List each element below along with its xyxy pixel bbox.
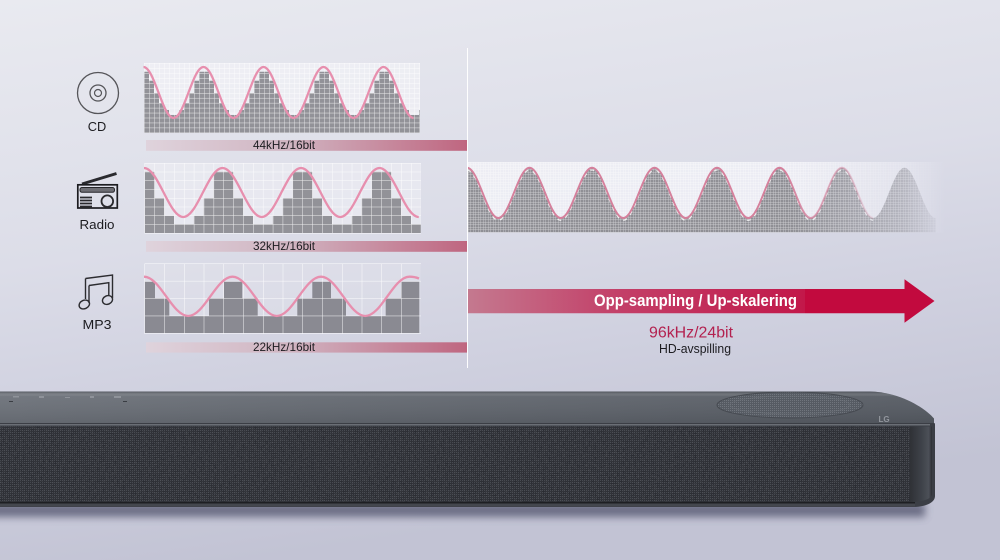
label: Radio: Radio (80, 217, 114, 232)
label bar: 32kHz/16bit: 32kHz/16bit (253, 239, 316, 253)
row: Radio (78, 163, 467, 253)
top control marks (9, 396, 127, 402)
chart: 44kHz waveform (144, 63, 420, 133)
chart: 22kHz waveform (144, 264, 421, 334)
icon: music note (78, 275, 114, 311)
chart: 32kHz waveform (144, 163, 421, 234)
row: MP3 (78, 264, 467, 354)
top speaker grille (717, 392, 863, 418)
label bar: 22kHz/16bit: 22kHz/16bit (253, 340, 316, 354)
text: HD-avspilling: HD-avspilling (659, 342, 731, 356)
label: MP3: MP3 (82, 317, 112, 332)
soundbar top surface (0, 392, 934, 424)
label bar: 32kHz/16bit (146, 239, 467, 253)
soundbar (0, 392, 935, 517)
LG logo: LG (878, 415, 890, 424)
label bar: 44kHz/16bit: 44kHz/16bit (253, 138, 316, 152)
soundbar shadow (0, 503, 925, 517)
arrow label: Opp-sampling / Up-skalering (594, 291, 797, 310)
label bar: 44kHz/16bit (146, 138, 467, 152)
text: 96kHz/24bit: 96kHz/24bit (649, 324, 734, 342)
soundbar front grille (0, 423, 935, 507)
label: CD: CD (88, 119, 106, 134)
row: CD (78, 63, 467, 152)
icon: compact disc (78, 72, 118, 114)
icon: radio (78, 174, 117, 208)
chart: upsampled 96kHz waveform (467, 162, 945, 232)
arrow: up-sampling (468, 279, 934, 323)
divider line (467, 48, 468, 368)
label bar: 22kHz/16bit (146, 340, 467, 354)
